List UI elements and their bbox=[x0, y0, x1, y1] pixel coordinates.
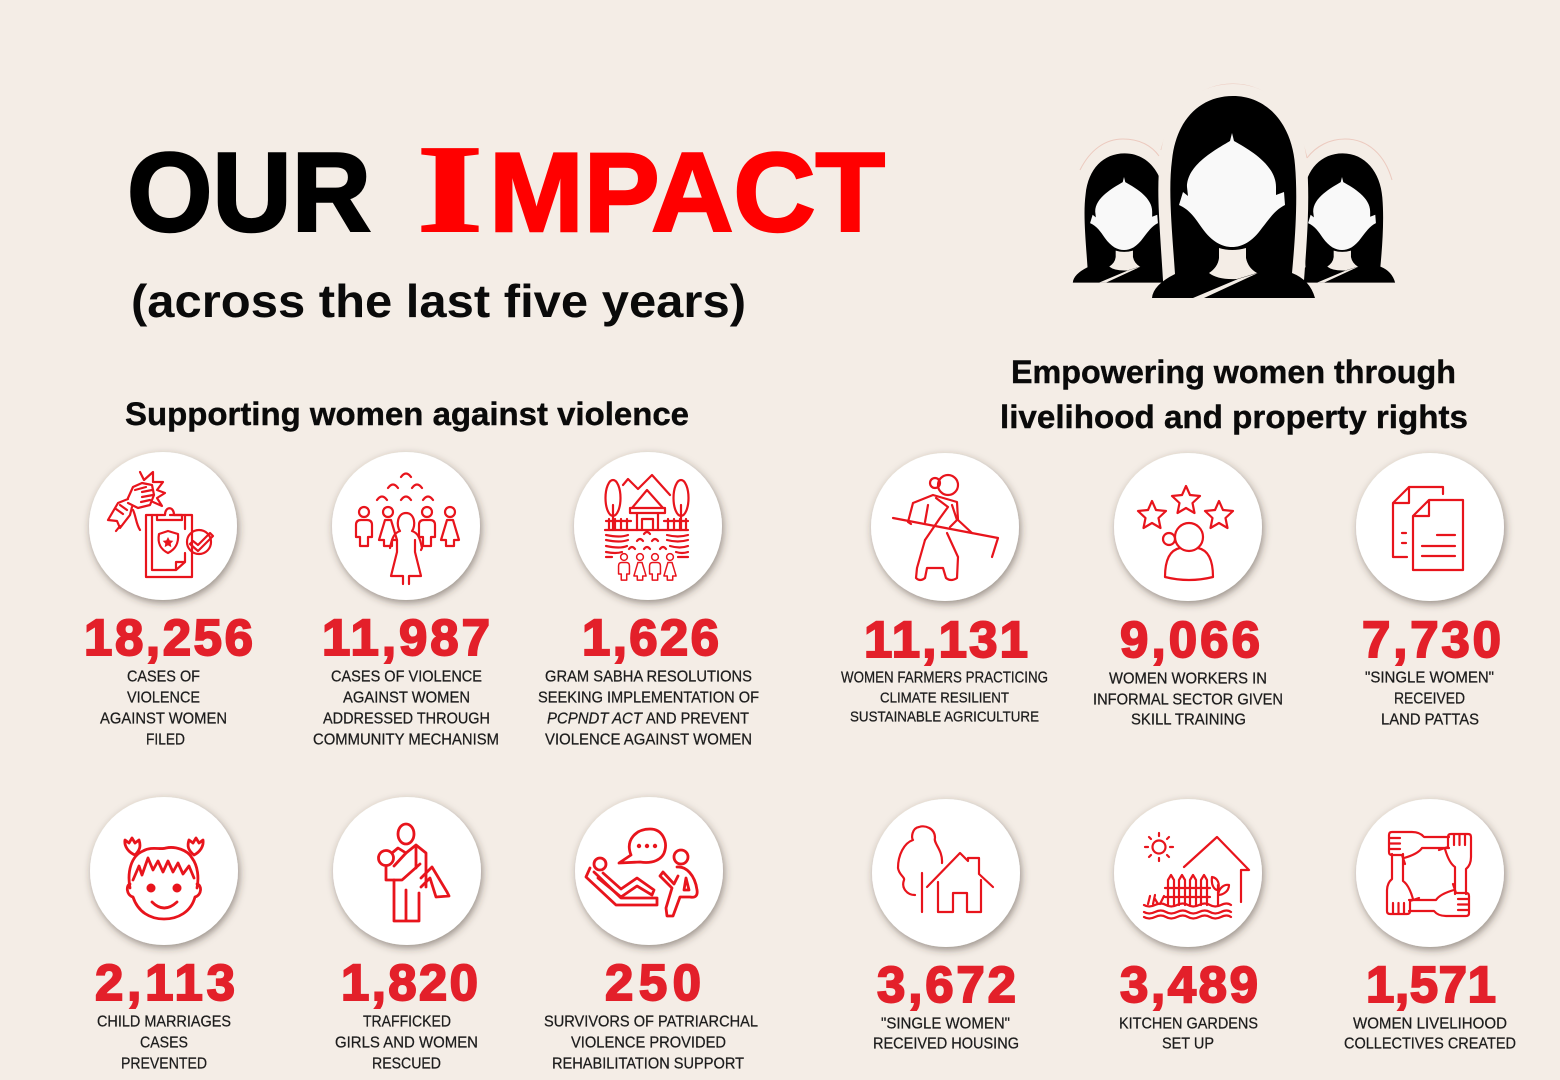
caption: CLIMATE RESILIENT bbox=[880, 690, 1009, 706]
title: MPACT bbox=[489, 130, 885, 255]
icon: girl face bbox=[125, 838, 203, 919]
circle: kitchen gardens bbox=[1114, 799, 1262, 947]
caption bbox=[538, 668, 759, 748]
caption: COLLECTIVES CREATED bbox=[1344, 1035, 1516, 1052]
caption bbox=[97, 1013, 231, 1072]
caption: SURVIVORS OF PATRIARCHAL bbox=[544, 1013, 758, 1030]
circle: community bbox=[332, 452, 480, 600]
circle: rescued bbox=[333, 797, 481, 945]
title bbox=[127, 121, 885, 259]
title: OUR bbox=[127, 130, 371, 255]
caption: FILED bbox=[146, 731, 185, 748]
caption: WOMEN WORKERS IN bbox=[1109, 670, 1267, 687]
panel: single women housing bbox=[872, 799, 1020, 1052]
caption: AGAINST WOMEN bbox=[100, 710, 227, 727]
caption: "SINGLE WOMEN" bbox=[881, 1015, 1010, 1032]
heading: empowering women: Empowering women through bbox=[1011, 354, 1456, 390]
value: 3,672 bbox=[877, 956, 1016, 1013]
caption bbox=[100, 668, 227, 748]
icon: village and people bbox=[605, 475, 688, 580]
circle: farmers bbox=[871, 453, 1019, 601]
value: 9,066 bbox=[1120, 611, 1260, 668]
panel: women workers bbox=[1093, 453, 1283, 728]
panel: livelihood collectives bbox=[1344, 799, 1516, 1052]
icon: three women silhouettes bbox=[1073, 84, 1395, 298]
caption: CHILD MARRIAGES bbox=[97, 1013, 231, 1030]
caption: AND PREVENT bbox=[646, 710, 749, 727]
caption: CASES bbox=[140, 1034, 188, 1051]
caption: VIOLENCE bbox=[127, 689, 200, 706]
heading: empowering women: livelihood and property rights bbox=[1000, 399, 1468, 435]
caption: RESCUED bbox=[372, 1055, 441, 1072]
panel: survivors rehabilitation bbox=[544, 797, 758, 1072]
caption: GRAM SABHA RESOLUTIONS bbox=[545, 668, 752, 685]
value: 1,626 bbox=[582, 609, 719, 666]
caption: GIRLS AND WOMEN bbox=[335, 1034, 478, 1051]
value: 18,256 bbox=[84, 609, 253, 666]
caption bbox=[544, 1013, 758, 1072]
caption: SET UP bbox=[1162, 1035, 1214, 1052]
title: I bbox=[417, 121, 483, 259]
icon: garden and house bbox=[1144, 833, 1249, 918]
caption bbox=[873, 1015, 1019, 1052]
value: 11,131 bbox=[864, 611, 1028, 668]
caption bbox=[313, 668, 499, 748]
caption: WOMEN LIVELIHOOD bbox=[1353, 1015, 1507, 1032]
caption: SEEKING IMPLEMENTATION OF bbox=[538, 689, 759, 706]
value: 3,489 bbox=[1120, 956, 1258, 1013]
panel: land pattas bbox=[1356, 453, 1504, 728]
caption: "SINGLE WOMEN" bbox=[1365, 669, 1494, 686]
value: 1,571 bbox=[1366, 956, 1496, 1013]
caption: PREVENTED bbox=[121, 1055, 207, 1072]
caption: ADDRESSED THROUGH bbox=[323, 710, 490, 727]
circle: workers bbox=[1114, 453, 1262, 601]
caption: LAND PATTAS bbox=[1381, 711, 1479, 728]
subtitle: (across the last five years) bbox=[131, 275, 746, 327]
caption bbox=[1093, 670, 1283, 728]
circle: cases filed bbox=[89, 452, 237, 600]
circle: collectives bbox=[1356, 799, 1504, 947]
icon: person carrying survivor bbox=[378, 824, 449, 921]
value: 7,730 bbox=[1362, 611, 1501, 668]
caption: KITCHEN GARDENS bbox=[1119, 1015, 1258, 1032]
panel: community mechanism bbox=[313, 452, 499, 748]
circle: survivors bbox=[575, 797, 723, 945]
caption: REHABILITATION SUPPORT bbox=[552, 1055, 744, 1072]
caption: PCPNDT ACT bbox=[547, 710, 643, 727]
value: 2,113 bbox=[95, 954, 235, 1011]
value: 1,820 bbox=[341, 954, 478, 1011]
circle: child marriages bbox=[90, 797, 238, 945]
caption: TRAFFICKED bbox=[363, 1013, 451, 1030]
icon: fist and clipboard bbox=[108, 472, 213, 577]
caption: COMMUNITY MECHANISM bbox=[313, 731, 499, 748]
caption bbox=[1344, 1015, 1516, 1052]
circle: pattas bbox=[1356, 453, 1504, 601]
panel: trafficked rescued bbox=[333, 797, 481, 1072]
panel: women farmers bbox=[841, 453, 1048, 725]
caption: SUSTAINABLE AGRICULTURE bbox=[850, 709, 1039, 725]
value: 11,987 bbox=[322, 609, 490, 666]
caption: INFORMAL SECTOR GIVEN bbox=[1093, 691, 1283, 708]
panel: kitchen gardens bbox=[1114, 799, 1262, 1052]
heading: supporting women against violence: Supporting women against violence bbox=[125, 396, 689, 432]
caption bbox=[335, 1013, 478, 1072]
panel: cases filed bbox=[84, 452, 253, 748]
circle: housing bbox=[872, 799, 1020, 947]
value: 250 bbox=[605, 954, 701, 1011]
caption: VIOLENCE AGAINST WOMEN bbox=[545, 731, 752, 748]
caption: VIOLENCE PROVIDED bbox=[571, 1034, 726, 1051]
icon: documents bbox=[1393, 487, 1463, 570]
icon: counselling session bbox=[586, 829, 697, 916]
caption bbox=[1119, 1015, 1258, 1052]
caption bbox=[841, 669, 1048, 725]
circle: gram sabha bbox=[574, 452, 722, 600]
caption bbox=[1365, 669, 1494, 728]
caption: CASES OF bbox=[127, 668, 200, 685]
heading: empowering women bbox=[1000, 354, 1468, 435]
icon: women group bbox=[356, 474, 459, 584]
icon: person with stars bbox=[1138, 486, 1233, 580]
icon: woman farmer with hoe bbox=[893, 475, 998, 580]
caption: AGAINST WOMEN bbox=[343, 689, 470, 706]
icon: four linked hands bbox=[1387, 832, 1471, 916]
caption: CASES OF VIOLENCE bbox=[331, 668, 482, 685]
panel: gram sabha resolutions bbox=[538, 452, 759, 748]
caption: WOMEN FARMERS PRACTICING bbox=[841, 669, 1048, 686]
caption: SKILL TRAINING bbox=[1131, 711, 1246, 728]
caption: RECEIVED bbox=[1394, 690, 1465, 707]
icon: tree and house bbox=[898, 826, 993, 912]
panel: child marriages bbox=[90, 797, 238, 1072]
caption: RECEIVED HOUSING bbox=[873, 1035, 1019, 1052]
